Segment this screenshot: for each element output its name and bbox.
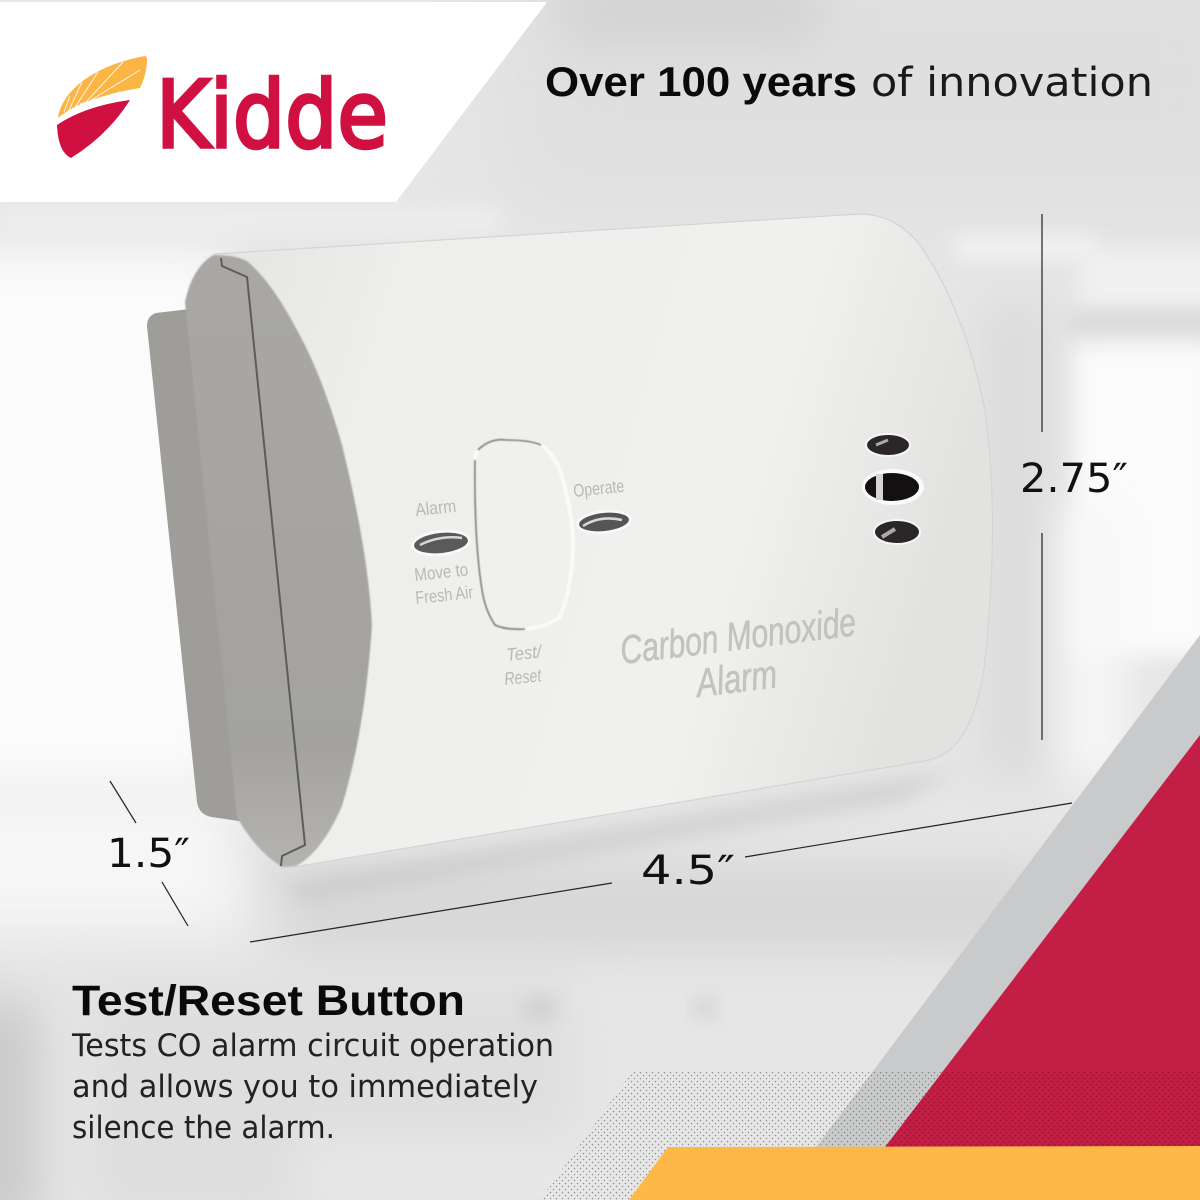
red diagonal panel [885,735,1200,1147]
feature callout: test/reset button [71,977,554,1146]
device shadow [200,770,960,900]
tagline: of innovation [871,60,1153,106]
callout body: Tests CO alarm circuit operation [71,1028,554,1064]
grey end cap [185,255,372,867]
rear flange [147,309,245,822]
Kidde logo [57,56,388,169]
end cap seam [221,258,305,866]
device body [215,214,992,867]
embossed device labels: Alarm [414,496,457,520]
embossed device labels: Carbon Monoxide [618,600,858,673]
halftone dot texture [540,1072,1200,1200]
test/reset button [475,440,573,629]
dimension: width 4.5 in [250,803,1072,942]
sensor vents [862,434,924,544]
embossed device labels: Reset [503,665,543,689]
yellow bottom band [629,1146,1200,1200]
embossed device labels: Test/ [505,641,544,665]
dimension: height 2.75 in: 2.75″ [1020,456,1128,502]
dimension: depth 1.5 in: 1.5″ [107,831,190,877]
callout heading: Test/Reset Button [72,977,465,1025]
callout body [71,1028,554,1146]
logo mark: sun leaf [57,56,147,158]
logo wordmark: Kidde [156,61,388,169]
status LEDs [410,507,633,559]
embossed device labels: Move to [413,559,469,585]
tagline [545,58,1153,106]
product: carbon monoxide alarm [147,214,992,900]
callout body: and allows you to immediately [72,1069,538,1105]
white logo panel [0,2,547,202]
embossed device labels: Alarm [692,652,779,706]
callout body: silence the alarm. [72,1110,335,1146]
embossed device labels: Operate [572,476,625,501]
embossed device labels: Fresh Air [414,582,474,608]
embossed device labels [413,476,858,706]
dimension: width 4.5 in: 4.5″ [641,848,735,894]
dimension: depth 1.5 in [107,781,190,926]
tagline: Over 100 years [545,58,857,105]
grey diagonal band [816,635,1200,1147]
